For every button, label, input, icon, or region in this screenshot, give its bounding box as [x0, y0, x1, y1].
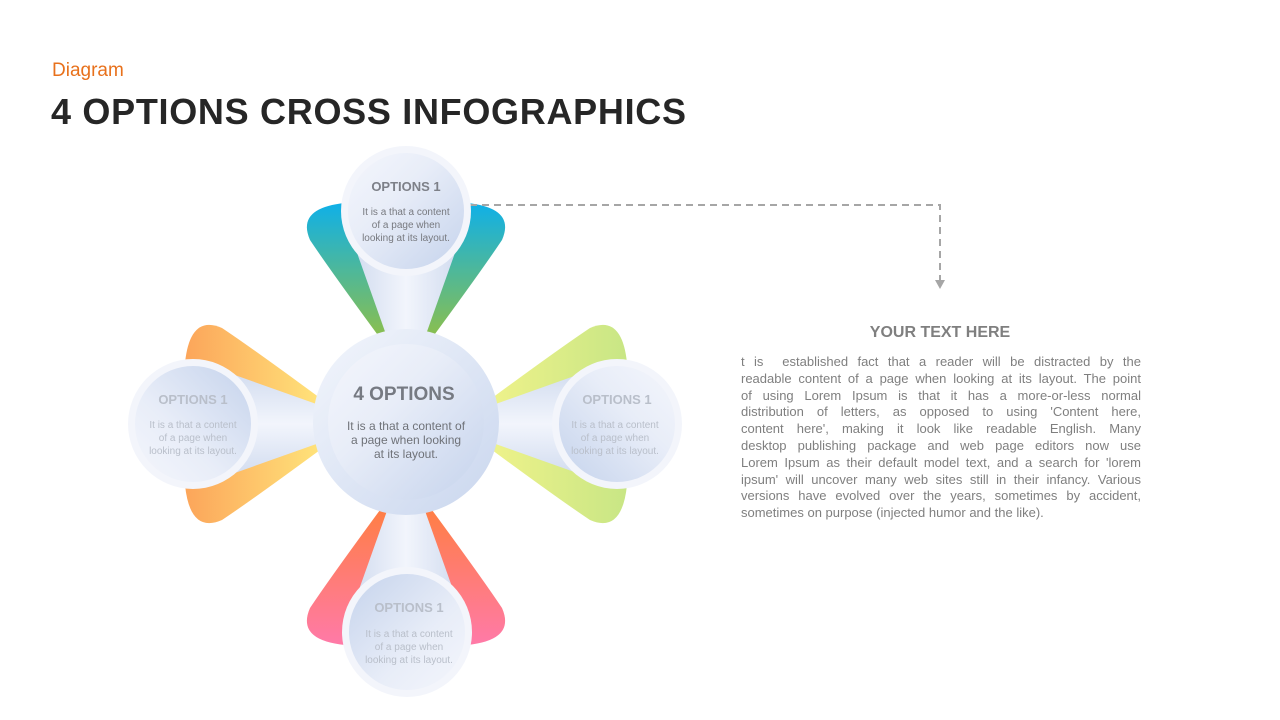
option circle: top: [341, 146, 471, 276]
option circle: bottom: It is a that a content: [365, 629, 453, 640]
option circle: left: of a page when: [159, 433, 227, 444]
petal: left: [185, 325, 322, 523]
option circle: right: [552, 359, 682, 489]
body paragraph: desktop publishing package and web page editors now use: [741, 438, 1141, 453]
text heading: YOUR TEXT HERE: [870, 324, 1010, 341]
body paragraph: content here', making it look like readable English. Many: [741, 421, 1141, 436]
body paragraph: [741, 354, 1141, 520]
option circle: right: OPTIONS 1: [582, 392, 652, 407]
option circle: left: OPTIONS 1: [158, 392, 228, 407]
body paragraph: of using Lorem Ipsum is that it has a more-or-less normal: [741, 388, 1141, 403]
option circle: right: of a page when: [581, 433, 649, 444]
body paragraph: versions have evolved over the years, sometimes by accident,: [741, 488, 1141, 503]
option circle: bottom: [342, 567, 472, 697]
petal: top: [307, 203, 505, 340]
center circle: [313, 329, 499, 515]
option circle: left: looking at its layout.: [149, 446, 237, 457]
body paragraph: t is established fact that a reader will be distracted by the: [741, 354, 1141, 369]
option circle: top: OPTIONS 1: [371, 179, 441, 194]
option circle: bottom: looking at its layout.: [365, 655, 453, 666]
option circle: right: looking at its layout.: [571, 446, 659, 457]
connector arrow: [470, 205, 945, 289]
center circle: at its layout.: [374, 447, 438, 461]
body paragraph: ipsum' will uncover many web sites still in their infancy. Various: [741, 472, 1141, 487]
option circle: bottom: of a page when: [375, 642, 443, 653]
center circle: 4 OPTIONS: [353, 384, 455, 405]
option circle: top: of a page when: [372, 220, 440, 231]
option circle: bottom: OPTIONS 1: [374, 600, 444, 615]
subtitle: Diagram: [52, 60, 124, 81]
option circle: left: It is a that a content: [149, 420, 237, 431]
option circle: top: looking at its layout.: [362, 233, 450, 244]
option circle: top: It is a that a content: [362, 207, 450, 218]
petal: right: [490, 325, 627, 523]
title: 4 OPTIONS CROSS INFOGRAPHICS: [51, 91, 687, 132]
option circle: left: [128, 359, 258, 489]
body paragraph: readable content of a page when looking at its layout. The point: [741, 371, 1141, 386]
petal: bottom: [307, 508, 505, 645]
body paragraph: distribution of letters, as opposed to using 'Content here,: [741, 404, 1141, 419]
center circle: a page when looking: [351, 433, 461, 447]
option circle: right: It is a that a content: [571, 420, 659, 431]
body paragraph: sometimes on purpose (injected humor and the like).: [741, 505, 1044, 520]
body paragraph: Lorem Ipsum as their default model text, and a search for 'lorem: [741, 455, 1141, 470]
center circle: It is a that a content of: [347, 419, 466, 433]
